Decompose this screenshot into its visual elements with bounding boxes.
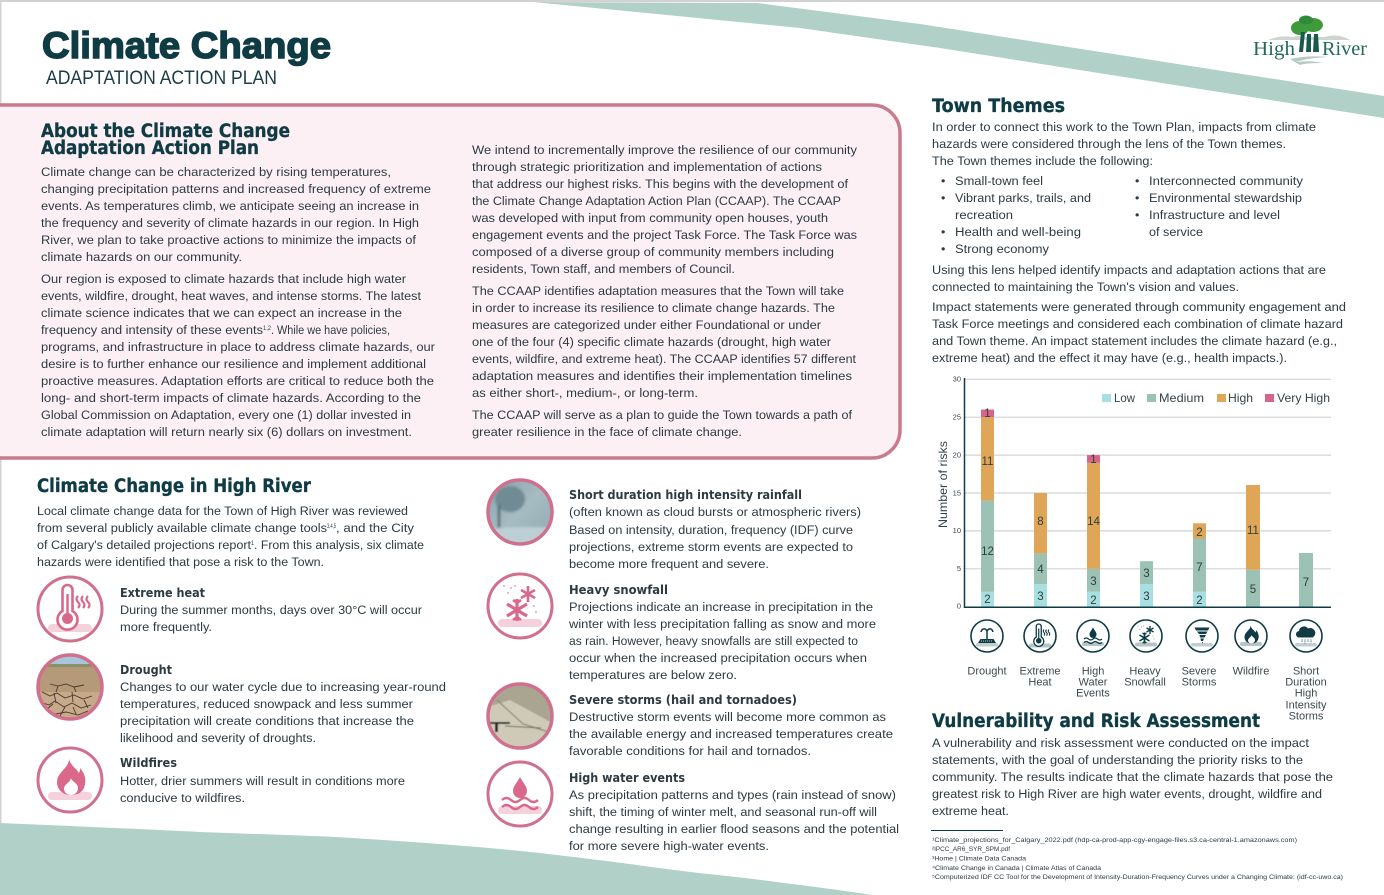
text block: town themes intro: The Town themes include the following: <box>932 154 1153 168</box>
text block: about column two: greater resilience in the face of climate change. <box>472 425 742 439</box>
text block: drought: precipitation will create conditions that increase the <box>120 714 414 728</box>
chart category labels: Storms <box>1182 676 1217 688</box>
axis tick labels: 30 <box>953 374 961 384</box>
bars: severe storms <box>1193 523 1206 607</box>
bar value labels: 3 <box>1143 568 1150 580</box>
text block: about column two: engagement events and the project Task Force. The Task Force was <box>472 228 857 242</box>
list: town themes left <box>941 174 1091 256</box>
footnotes: ¹Climate_projections_for_Calgary_2022.pdf (hdp-ca-prod-app-cgy-engage-files.s3.ca-central-1.amazonaws.com) <box>932 837 1297 844</box>
bar value labels <box>981 408 1309 607</box>
text block: town themes intro <box>932 120 1316 168</box>
icon: drought <box>971 620 1003 652</box>
icon: wildfire <box>1235 620 1267 652</box>
axis tick labels: 20 <box>953 450 961 460</box>
footnotes: ⁵Computerized IDF CC Tool for the Development of Intensity-Duration-Frequency Curves under a Changing Climate: (idf-cc-uwo.ca) <box>932 874 1343 881</box>
text block: drought <box>120 662 446 745</box>
list: town themes left: • <box>941 174 945 188</box>
bars: short duration <box>1299 553 1313 607</box>
text block: extreme heat: During the summer months, days over 30°C will occur <box>120 603 422 617</box>
chart category labels: Heat <box>1028 676 1052 688</box>
text block: local data intro: 1 <box>251 541 255 547</box>
text block: about column two: the Climate Change Adaptation Action Plan (CCAAP). The CCAAP <box>472 194 841 208</box>
text block: severe storms: favorable conditions for hail and tornados. <box>569 744 811 758</box>
text block: about column one: Global Commission on Adaptation, every one (1) dollar invested in <box>41 408 411 422</box>
bars: drought <box>981 410 994 607</box>
text block: rainfall: Based on intensity, duration, frequency (IDF) curve <box>569 523 853 537</box>
chart category labels: Short <box>1293 666 1319 678</box>
text block: impact statements: connected to maintaining the Town's vision and values. <box>932 280 1239 294</box>
list: town themes right: Environmental stewardship <box>1149 191 1302 205</box>
bar value labels: 11 <box>982 456 993 468</box>
text block: local data intro: , and the City <box>336 521 415 535</box>
text block: about column two: events, wildfire, and extreme heat). The CCAAP identifies 57 different <box>472 352 857 366</box>
text block: about column two <box>471 143 858 439</box>
chart category labels: High <box>1082 666 1104 678</box>
list: town themes left: • <box>941 242 945 256</box>
text block: about column one: frequency and intensity of these events <box>41 323 263 337</box>
text block: about column one: River, we plan to take proactive actions to minimize the impacts of <box>41 233 417 247</box>
icon: heavy snowfall <box>488 574 552 638</box>
text block: local data intro: . From this analysis, six climate <box>254 538 424 552</box>
text block: about column one <box>41 165 435 439</box>
text block: severe storms <box>569 692 893 758</box>
footnotes: ³Home | Climate Data Canada <box>932 856 1026 862</box>
subtitle: ADAPTATION ACTION PLAN <box>46 67 277 89</box>
text block: about column two: was developed with input from community open houses, youth <box>471 211 828 225</box>
heading: about <box>41 121 290 159</box>
text block: impact statements: and Town theme. An impact statement includes the climate hazard (e.g., <box>932 334 1337 348</box>
icon: high water <box>1077 620 1109 652</box>
text block: local data intro: hazards were identified that pose a risk to the Town. <box>37 555 324 569</box>
text block: severe storms: Severe storms (hail and tornadoes) <box>569 692 797 707</box>
text block: rainfall <box>569 487 861 571</box>
text block: local data intro: of Calgary's detailed projections report <box>37 538 252 552</box>
text block: vulnerability: greatest risk to High River are high water events, drought, wildfire and <box>932 787 1322 801</box>
bar value labels: 12 <box>981 546 994 558</box>
text block: heavy snowfall: Projections indicate an increase in precipitation in the <box>569 600 873 614</box>
list: town themes right: Infrastructure and level <box>1149 208 1280 222</box>
axis tick labels: 5 <box>957 564 961 573</box>
text block: about column two: in order to increase its resilience to climate change hazards. The <box>472 301 835 315</box>
bar value labels: 3 <box>1143 591 1150 603</box>
chart category labels: High <box>1295 688 1317 700</box>
bars: wildfire <box>1246 485 1260 607</box>
text block: wildfires: Wildfires <box>120 755 177 770</box>
text block: about column two: residents, Town staff, and members of Council. <box>472 262 735 276</box>
legend: High <box>1228 391 1253 405</box>
text block: town themes intro: In order to connect this work to the Town Plan, impacts from climate <box>932 120 1316 134</box>
heading: town themes: Town Themes <box>932 96 1065 117</box>
text block: extreme heat: more frequently. <box>120 620 212 634</box>
text block: heavy snowfall: as rain. However, heavy snowfalls are still expected to <box>569 634 858 648</box>
list: town themes right: Interconnected community <box>1149 174 1304 188</box>
text block: about column two: as either short-, medium-, or long-term. <box>472 386 698 400</box>
photo: drought cracked earth <box>38 655 102 720</box>
text block: drought: likelihood and severity of droughts. <box>120 731 316 745</box>
icon: extreme heat <box>38 577 102 641</box>
axis tick labels: 25 <box>953 412 961 422</box>
text block: vulnerability: extreme heat. <box>932 804 1009 818</box>
heading: climate change in high river: Climate Change in High River <box>37 476 312 497</box>
photo: severe storm <box>484 684 554 752</box>
text block: vulnerability <box>932 736 1333 818</box>
chart category labels: Duration <box>1285 676 1327 688</box>
bar value labels: 7 <box>1196 562 1203 574</box>
text block: vulnerability: community. The results indicate that the climate hazards that pose the <box>932 770 1333 784</box>
icon: severe storms <box>1186 620 1218 652</box>
text block: drought: Changes to our water cycle due to increasing year-round <box>120 680 446 694</box>
chart category labels: Intensity <box>1286 700 1327 712</box>
text block: about column two: The CCAAP will serve as a plan to guide the Town towards a path of <box>472 408 853 422</box>
bar value labels: 3 <box>1090 576 1097 588</box>
text block: about column one: programs, and infrastructure in place to address climate hazards, our <box>41 340 435 354</box>
text block: high water events: for more severe high-water events. <box>569 839 769 853</box>
chart hazard icons <box>971 620 1322 652</box>
title: Climate Change <box>42 25 331 66</box>
list: town themes right: • <box>1135 174 1139 188</box>
chart category labels: Events <box>1076 688 1110 700</box>
text block: drought: temperatures, reduced snowpack and less summer <box>120 697 413 711</box>
panel: about the plan <box>0 105 900 458</box>
text block: about column one: Our region is exposed to climate hazards that include high water <box>41 272 406 286</box>
legend: Very High <box>1277 391 1330 405</box>
bar value labels: 11 <box>1247 525 1259 537</box>
text block: local data intro <box>37 504 424 569</box>
text block: heavy snowfall: Heavy snowfall <box>569 582 668 597</box>
chart category labels: Snowfall <box>1124 676 1166 688</box>
bar value labels: 1 <box>984 408 991 420</box>
text block: about column two: adaptation measures and identifies their implementation timelines <box>472 369 852 383</box>
text block: high water events <box>569 770 899 853</box>
text block: impact statements: Impact statements were generated through community engagement and <box>932 300 1346 314</box>
text block: about column two: that address our highest risks. This begins with the development of <box>472 177 849 191</box>
bar value labels: 2 <box>1196 595 1203 607</box>
text block: rainfall: Short duration high intensity rainfall <box>569 487 802 502</box>
chart category labels: Wildfire <box>1233 666 1269 678</box>
text block: impact statements: Using this lens helped identify impacts and adaptation actions that are <box>932 263 1326 277</box>
text block: extreme heat: Extreme heat <box>120 585 205 600</box>
text block: about column one: Climate change can be characterized by rising temperatures, <box>41 165 391 179</box>
bar value labels: 8 <box>1037 516 1044 528</box>
text block: vulnerability: statements, with the goal of understanding the priority risks to the <box>932 753 1303 767</box>
bar value labels: 7 <box>1303 577 1309 589</box>
bar value labels: 1 <box>1090 454 1097 466</box>
text block: local data intro: from several publicly available climate change tools <box>37 521 327 535</box>
text block: high water events: change resulting in earlier flood seasons and the potential <box>569 822 899 836</box>
text block: about column one: desire is to further enhance our resilience and implement additional <box>41 357 426 371</box>
heading: about: About the Climate Change <box>41 121 290 142</box>
axis tick labels: 10 <box>953 526 961 535</box>
bottom green wave <box>0 823 872 895</box>
text block: about column one: climate hazards on our community. <box>41 250 242 264</box>
footnotes: ⁴Climate Change in Canada | Climate Atlas of Canada <box>932 865 1101 872</box>
text block: high water events: As precipitation patterns and types (rain instead of snow) <box>569 788 896 802</box>
bar value labels: 3 <box>1037 591 1044 603</box>
text block: extreme heat <box>120 585 422 634</box>
axis tick labels: 0 <box>957 602 961 610</box>
logo: High River: River <box>1322 38 1367 60</box>
text block: about column two: one of the four (4) specific climate hazards (drought, high water <box>472 335 831 349</box>
icon: short duration storms <box>1290 620 1322 652</box>
list: town themes right <box>1135 174 1304 239</box>
text block: severe storms: the available energy and increased temperatures create <box>569 727 893 741</box>
text block: rainfall: projections, extreme storm events are expected to <box>569 540 853 554</box>
chart category labels: Storms <box>1289 710 1324 722</box>
list: town themes left: • <box>941 191 945 205</box>
text block: about column one: changing precipitation patterns and increased frequency of extreme <box>41 182 431 196</box>
bars: extreme heat <box>1034 493 1047 607</box>
list: town themes right: of service <box>1149 225 1203 239</box>
text block: severe storms: Destructive storm events will become more common as <box>569 710 886 724</box>
footnotes <box>932 837 1343 881</box>
text block: heavy snowfall <box>568 582 876 682</box>
text block: impact statements: Task Force meetings and considered each combination of climate hazard <box>932 317 1343 331</box>
text block: rainfall: (often known as cloud bursts or atmospheric rivers) <box>569 505 861 519</box>
text block: town themes intro: hazards were considered through the lens of the Town themes. <box>932 137 1286 151</box>
text block: rainfall: become more frequent and severe. <box>569 557 769 571</box>
text block: about column one: the frequency and severity of climate hazards in our region. In High <box>41 216 419 230</box>
text block: local data intro: 3,4,5 <box>327 524 336 530</box>
chart category labels: Extreme <box>1020 666 1060 678</box>
legend: Medium <box>1159 391 1204 405</box>
text block: about column one: climate adaptation will return nearly six (6) dollars on investment. <box>41 425 412 439</box>
text block: about column one: proactive measures. Adaptation efforts are critical to reduce both the <box>41 374 434 388</box>
bar value labels: 5 <box>1250 584 1256 596</box>
text block: about column two: composed of a diverse group of community members including <box>472 245 834 259</box>
bar value labels: 14 <box>1087 516 1100 528</box>
chart category labels: Drought <box>967 666 1007 678</box>
text block: about column two: We intend to incrementally improve the resilience of our community <box>472 143 858 157</box>
icon: wildfires <box>38 748 102 812</box>
icon: snowfall <box>1130 620 1162 652</box>
text block: local data intro: Local climate change data for the Town of High River was reviewed <box>37 504 408 518</box>
text block: about column two: through strategic prioritization and implementation of actions <box>472 160 822 174</box>
text block: drought: Drought <box>120 662 172 677</box>
chart category labels: Severe <box>1182 666 1216 678</box>
axis tick labels <box>953 374 961 610</box>
legend <box>1102 391 1330 405</box>
photo: rainfall <box>484 480 556 546</box>
text block: about column one: events, wildfire, drought, heat waves, and intense storms. The latest <box>41 289 422 303</box>
logo: High River: High <box>1253 38 1295 60</box>
bars: heavy snowfall <box>1140 561 1153 607</box>
list: town themes left: • <box>941 225 945 239</box>
text block: about column one: climate science indicates that we can expect an increase in the <box>41 306 402 320</box>
bars: high water events <box>1087 455 1100 607</box>
top green swoosh <box>533 2 1384 118</box>
text block: wildfires <box>120 755 405 805</box>
text block: impact statements: extreme heat) and the effect it may have (e.g., health impacts.). <box>932 351 1287 365</box>
text block: heavy snowfall: winter with less precipitation falling as snow and more <box>568 617 876 631</box>
bar value labels: 4 <box>1037 564 1044 576</box>
chart category labels: Water <box>1079 676 1108 688</box>
chart category labels <box>967 666 1327 722</box>
text block: high water events: High water events <box>569 770 685 785</box>
text block: about column one: long- and short-term impacts of climate hazards. According to the <box>41 391 421 405</box>
text block: vulnerability: A vulnerability and risk assessment were conducted on the impact <box>932 736 1310 750</box>
footnotes: ²IPCC_AR6_SYR_SPM.pdf <box>932 846 1010 853</box>
text block: about column two: measures are categorized under either Foundational or under <box>472 318 821 332</box>
text block: high water events: shift, the timing of winter melt, and seasonal run-off will <box>569 805 877 819</box>
list: town themes left: recreation <box>955 208 1013 222</box>
text block: about column one: events. As temperatures climb, we anticipate seeing an increase in <box>41 199 419 213</box>
bar value labels: 2 <box>1196 527 1203 539</box>
axis tick labels: 15 <box>953 488 961 498</box>
text block: wildfires: Hotter, drier summers will result in conditions more <box>120 774 405 788</box>
list: town themes left: Small-town feel <box>955 174 1043 188</box>
text block: about column one: 1,2 <box>263 326 272 332</box>
bar chart: number of risks by hazard <box>936 374 1331 610</box>
logo: High River <box>1253 16 1367 65</box>
list: town themes right: • <box>1135 208 1139 222</box>
bar value labels: 2 <box>984 594 991 606</box>
text block: about column two: The CCAAP identifies adaptation measures that the Town will take <box>472 284 844 298</box>
text block: about column one: . While we have policies, <box>271 323 390 337</box>
list: town themes left: Strong economy <box>955 242 1050 256</box>
axis title: Number of risks <box>936 441 950 528</box>
legend: Low <box>1114 391 1135 405</box>
list: town themes left: Vibrant parks, trails, and <box>955 191 1091 205</box>
title <box>42 25 331 89</box>
chart category labels: Heavy <box>1129 666 1161 678</box>
text block: heavy snowfall: occur when the increased precipitation occurs when <box>569 651 867 665</box>
bar value labels: 2 <box>1090 595 1097 607</box>
text block: heavy snowfall: temperatures are below zero. <box>569 668 737 682</box>
icon: extreme heat <box>1024 620 1056 652</box>
text block: impact statements <box>932 263 1346 365</box>
icon: high water events <box>488 762 552 826</box>
text block: wildfires: conducive to wildfires. <box>120 791 245 805</box>
list: town themes left: Health and well-being <box>955 225 1081 239</box>
heading: vulnerability and risk assessment: Vulnerability and Risk Assessment <box>932 711 1260 732</box>
heading: about: Adaptation Action Plan <box>41 138 259 159</box>
list: town themes right: • <box>1135 191 1139 205</box>
